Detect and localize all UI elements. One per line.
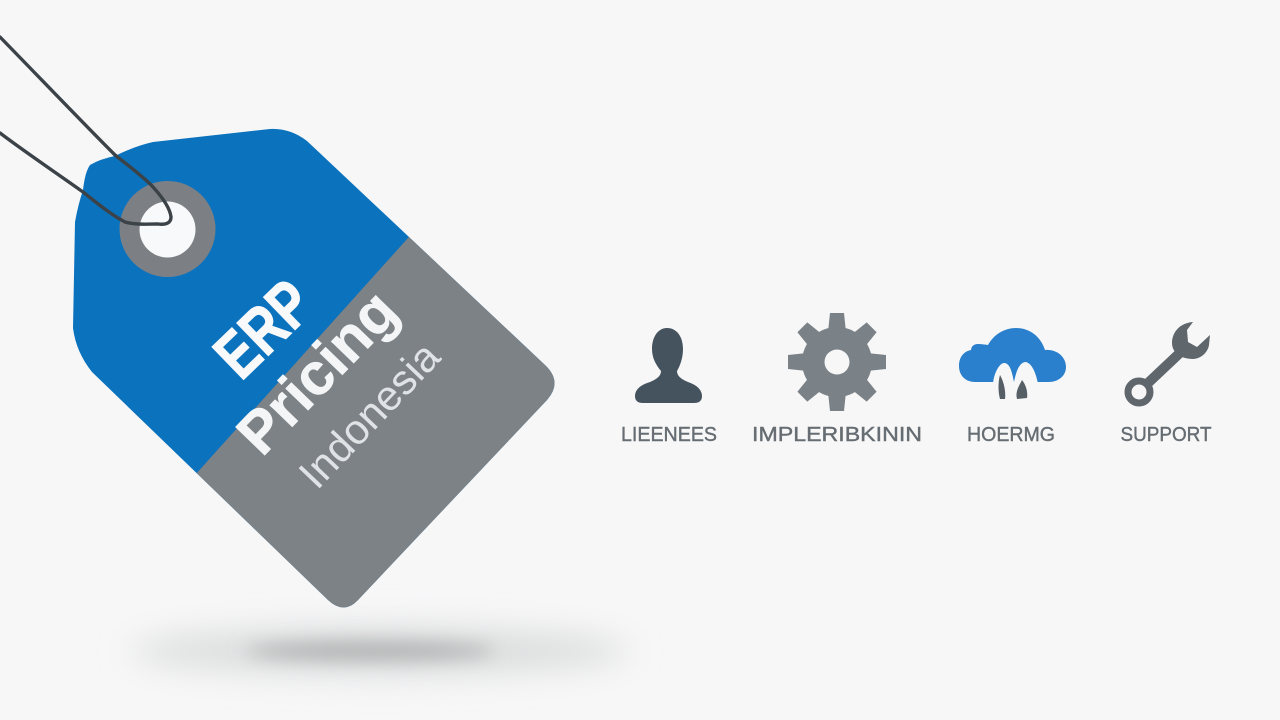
label: licenses: LIEENEES xyxy=(621,424,717,446)
tag body: gray lower section xyxy=(196,237,554,608)
tag title: ERP: ERP xyxy=(199,265,327,392)
tag title: Pricing: Pricing xyxy=(224,277,410,467)
label: implementation: IMPLERIBKININ xyxy=(752,424,922,446)
label: support: SUPPORT xyxy=(1120,424,1212,446)
tag body: blue upper section xyxy=(60,120,570,620)
icon: implementation gear xyxy=(788,313,886,411)
string loop xyxy=(0,37,171,224)
icon: support wrench xyxy=(1128,322,1210,403)
icon: hosting cloud xyxy=(959,328,1066,402)
icon: licenses person xyxy=(635,328,702,403)
price tag xyxy=(73,128,555,608)
tag subtitle: Indonesia: Indonesia xyxy=(289,332,449,497)
tag eyelet xyxy=(120,181,216,277)
label: hosting: HOERMG xyxy=(967,424,1055,446)
ground shadow xyxy=(130,627,630,675)
